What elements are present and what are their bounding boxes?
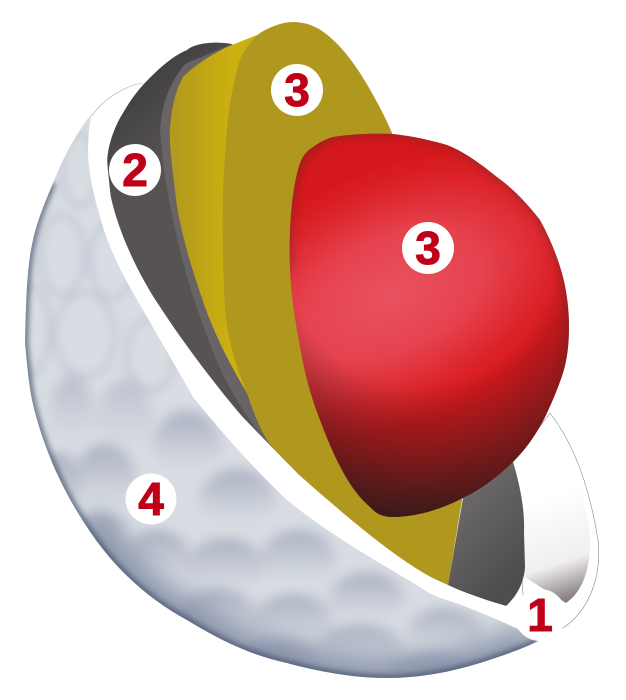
layer 4: dimpled outer cover bbox=[25, 113, 538, 678]
marker 3: red core bbox=[402, 222, 454, 274]
layer 2: grey mantle, back bbox=[107, 43, 290, 470]
marker 4 bbox=[126, 473, 176, 525]
layer 3: dark gold band bbox=[223, 22, 462, 585]
marker 1 bbox=[514, 589, 566, 641]
faint dimple ridges, upper cover bbox=[32, 132, 175, 393]
marker 3: gold layer bbox=[271, 64, 323, 116]
marker 4: 4 bbox=[138, 473, 164, 525]
rim outline at top bbox=[92, 83, 143, 116]
marker 2: 2 bbox=[122, 144, 148, 196]
layer 2: grey mantle, front bbox=[448, 462, 525, 607]
layer 3: bright gold band bbox=[170, 33, 300, 445]
marker 1: 1 bbox=[527, 589, 553, 641]
layer 3: red core bbox=[290, 134, 569, 517]
marker 3: gold layer: 3 bbox=[284, 64, 310, 116]
dimples bbox=[40, 375, 483, 686]
edge shading along the lower rim bbox=[87, 527, 540, 678]
layer 4: white rim band bbox=[88, 83, 540, 630]
inner cup highlight bbox=[513, 418, 590, 603]
marker 2 bbox=[109, 144, 161, 196]
marker 3: red core: 3 bbox=[415, 222, 441, 274]
inner white shell surface bbox=[513, 413, 599, 628]
